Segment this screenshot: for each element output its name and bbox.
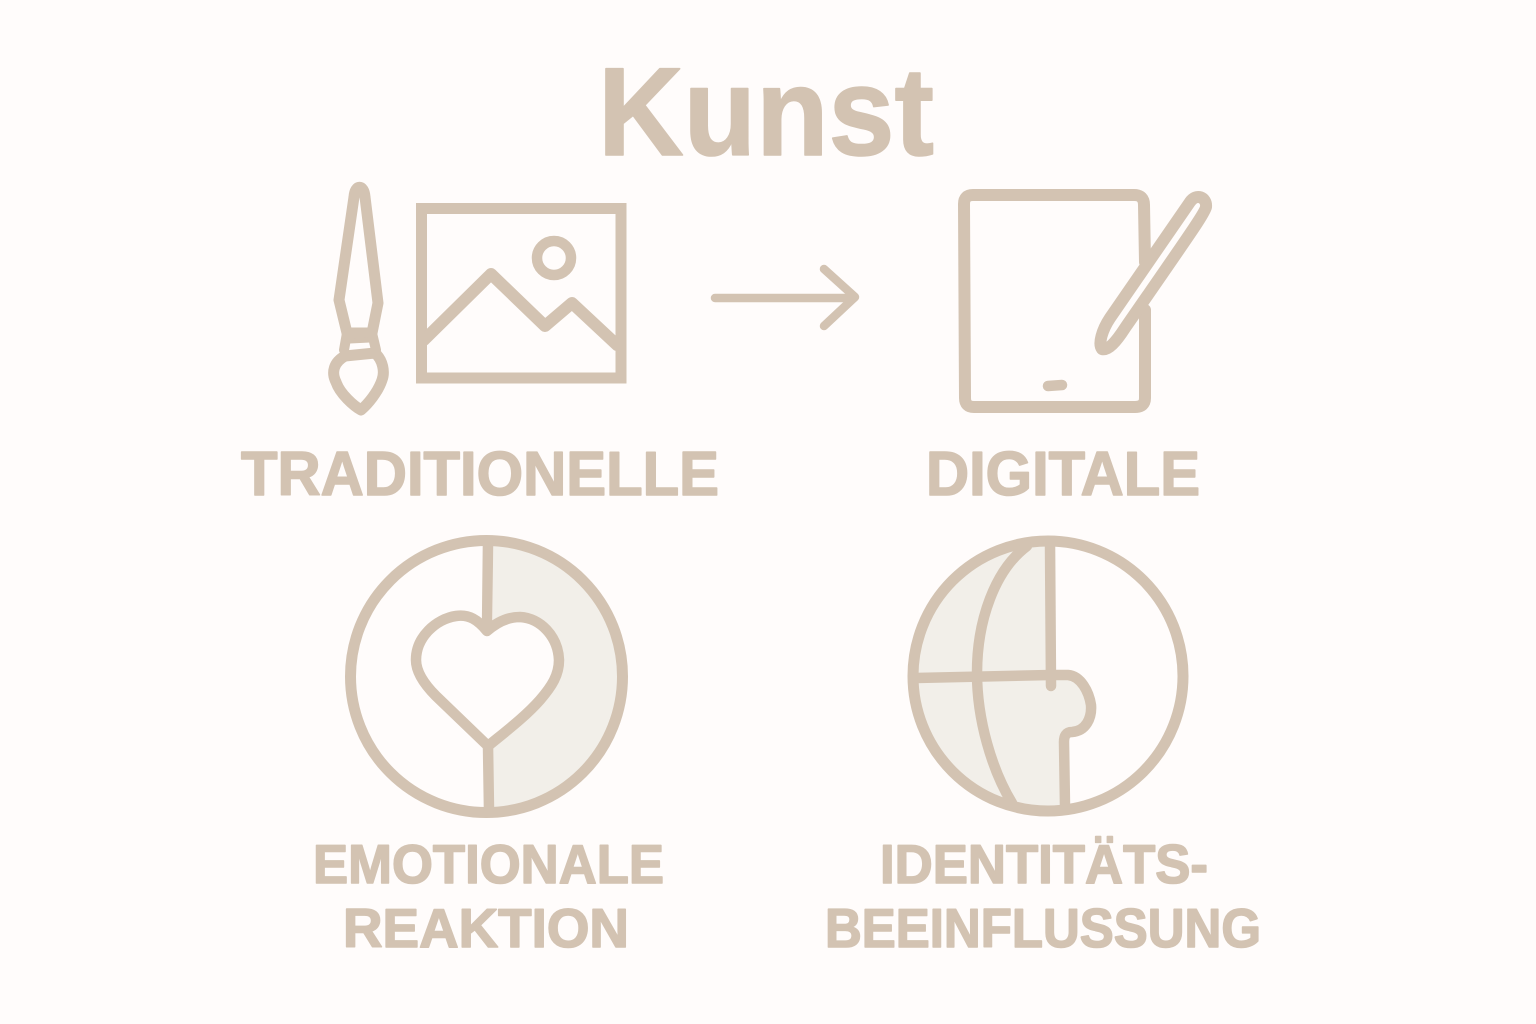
icon: framed landscape picture [422,208,621,378]
arrow [715,269,855,326]
label: identitaets-beeinflussung [825,833,1261,959]
icon: tablet with stylus [964,195,1206,407]
label: emotionale reaktion: REAKTION [343,897,629,959]
icon: circle with heart [350,540,622,812]
label: emotionale reaktion [313,833,664,959]
label: traditionelle: TRADITIONELLE [241,440,719,509]
label: emotionale reaktion: EMOTIONALE [313,833,664,895]
label: digitale: DIGITALE [926,440,1200,509]
icon: paintbrush [334,187,383,410]
title: Kunst [598,43,934,182]
label: identitaets-beeinflussung: IDENTITÄTS- [880,833,1208,895]
icon: globe with face profile [913,541,1183,811]
label: identitaets-beeinflussung: BEEINFLUSSUNG [825,897,1261,959]
